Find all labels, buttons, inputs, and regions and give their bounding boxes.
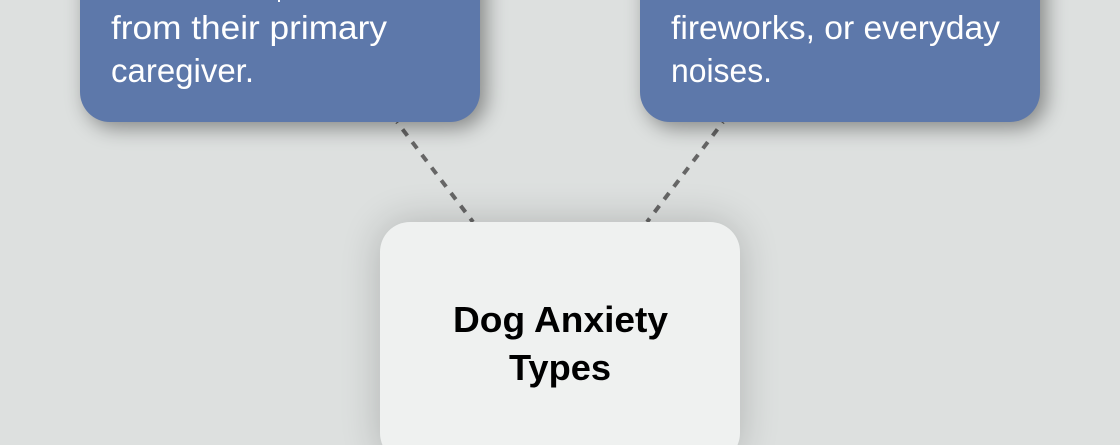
text block: separation anxiety description: caregiver. [111, 52, 254, 89]
text block: noise anxiety description: noises. [671, 52, 772, 89]
text block: noise anxiety description [671, 9, 1001, 89]
text block: noise anxiety description: fireworks, or everyday [671, 9, 1001, 46]
panel: noise anxiety card [640, 0, 1040, 122]
panel: central topic card [380, 222, 740, 445]
heading: Dog Anxiety Types: Types [509, 347, 611, 388]
text block: separation anxiety description [111, 0, 388, 89]
text block: separation anxiety description: from their primary [111, 9, 388, 46]
heading: Dog Anxiety Types: Dog Anxiety [453, 299, 668, 340]
heading: Dog Anxiety Types [453, 299, 668, 388]
panel: separation anxiety card [80, 0, 480, 122]
